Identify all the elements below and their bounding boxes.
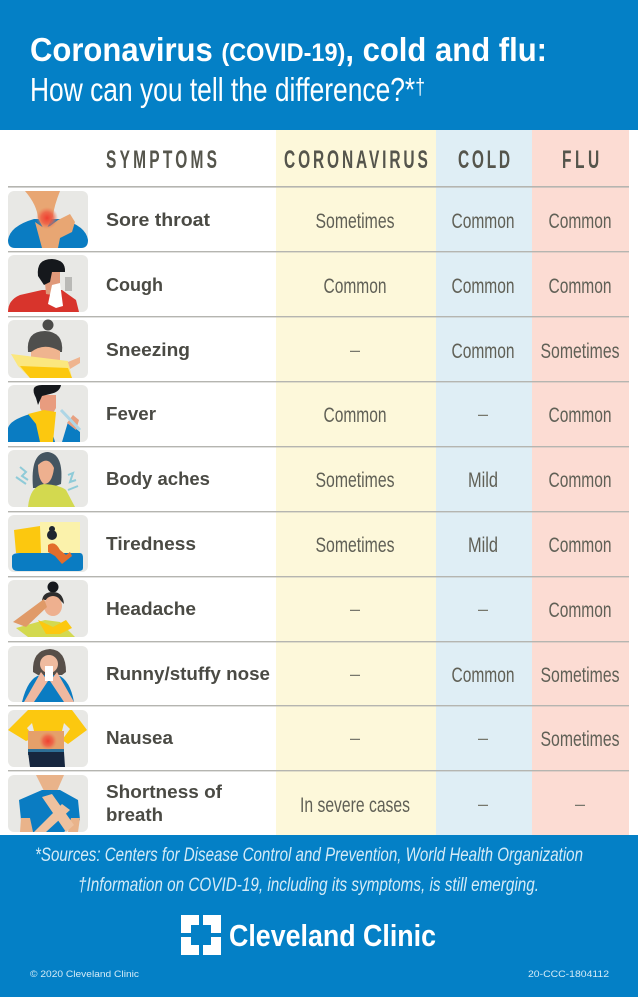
row: headache: Headache — [106, 598, 196, 619]
logo mark — [181, 915, 221, 955]
row: sneezing: Sneezing — [106, 339, 190, 360]
row: body aches — [106, 468, 612, 492]
row: sore throat: Common — [452, 210, 514, 233]
row: tiredness — [106, 533, 612, 557]
row: sneezing — [106, 339, 620, 363]
row: body aches: Common — [548, 469, 612, 492]
emerging information note: †Information on COVID-19, including its symptoms, is still emerging. — [78, 875, 539, 896]
icon: shortness of breath — [8, 775, 88, 832]
row: sore throat — [106, 209, 612, 233]
icon: sneezing — [8, 320, 88, 378]
row: sneezing: – — [350, 340, 360, 360]
row: body aches: Body aches — [106, 468, 210, 489]
row: tiredness: Tiredness — [106, 533, 196, 554]
row: tiredness: Common — [548, 534, 612, 557]
row: shortness of breath — [106, 781, 585, 825]
column tint: coronavirus — [276, 130, 436, 835]
row: shortness of breath: – — [575, 794, 585, 814]
row: cough: Cough — [106, 274, 163, 295]
copyright: © 2020 Cleveland Clinic — [30, 969, 140, 979]
subtitle: † — [415, 74, 425, 99]
row: runny nose: – — [350, 664, 360, 684]
row: headache — [106, 598, 612, 622]
document code: 20-CCC-1804112 — [528, 969, 609, 979]
row: nausea: – — [350, 728, 360, 748]
icon: body aches — [8, 450, 88, 507]
row: nausea — [106, 727, 620, 751]
table headings: CORONAVIRUS — [284, 146, 428, 174]
icon: runny nose — [8, 646, 88, 702]
row: fever: – — [478, 404, 488, 424]
icon: fever — [8, 385, 88, 442]
row: nausea: Nausea — [106, 727, 174, 748]
row: fever: Common — [324, 404, 386, 427]
icon: headache — [8, 580, 88, 637]
icon: cough — [8, 255, 88, 312]
row: nausea: – — [478, 728, 488, 748]
logo wordmark: Cleveland Clinic — [229, 918, 436, 953]
row: body aches: Sometimes — [316, 469, 394, 492]
table headings: FLU — [562, 146, 599, 174]
subtitle: How can you tell the difference?* — [30, 71, 512, 108]
row: sore throat: Sore throat — [106, 209, 210, 230]
row: cough: Common — [548, 275, 612, 298]
row: fever: Fever — [106, 403, 156, 424]
header banner — [0, 0, 638, 130]
row: runny nose — [106, 663, 620, 687]
row: shortness of breath: – — [478, 794, 488, 814]
row: shortness of breath: In severe cases — [300, 794, 410, 817]
row: cough: Common — [452, 275, 514, 298]
row: fever: Common — [548, 404, 612, 427]
table headings: SYMPTOMS — [106, 146, 217, 174]
icon: sore throat — [8, 191, 88, 248]
table headings — [106, 146, 599, 174]
table headings: COLD — [458, 146, 510, 174]
row: headache: – — [478, 599, 488, 619]
footer banner — [0, 835, 638, 997]
row: shortness of breath: breath — [106, 804, 163, 825]
row: headache: Common — [548, 599, 612, 622]
row: cough: Common — [324, 275, 386, 298]
title: Coronavirus (COVID-19), cold and flu: — [30, 31, 547, 68]
row: sore throat: Sometimes — [316, 210, 394, 233]
row: sneezing: Common — [452, 340, 514, 363]
row: runny nose: Runny/stuffy nose — [106, 663, 270, 684]
icon: tiredness — [8, 515, 88, 572]
row: cough — [106, 274, 612, 298]
column tint: flu — [532, 130, 629, 835]
row: fever — [106, 403, 612, 427]
row: tiredness: Mild — [468, 534, 498, 557]
icon: nausea — [8, 710, 88, 767]
row: sore throat: Common — [548, 210, 612, 233]
row: tiredness: Sometimes — [316, 534, 394, 557]
row: headache: – — [350, 599, 360, 619]
row: shortness of breath: Shortness of — [106, 781, 223, 802]
row: body aches: Mild — [468, 469, 498, 492]
row: runny nose: Common — [452, 664, 514, 687]
column tint: cold — [436, 130, 532, 835]
